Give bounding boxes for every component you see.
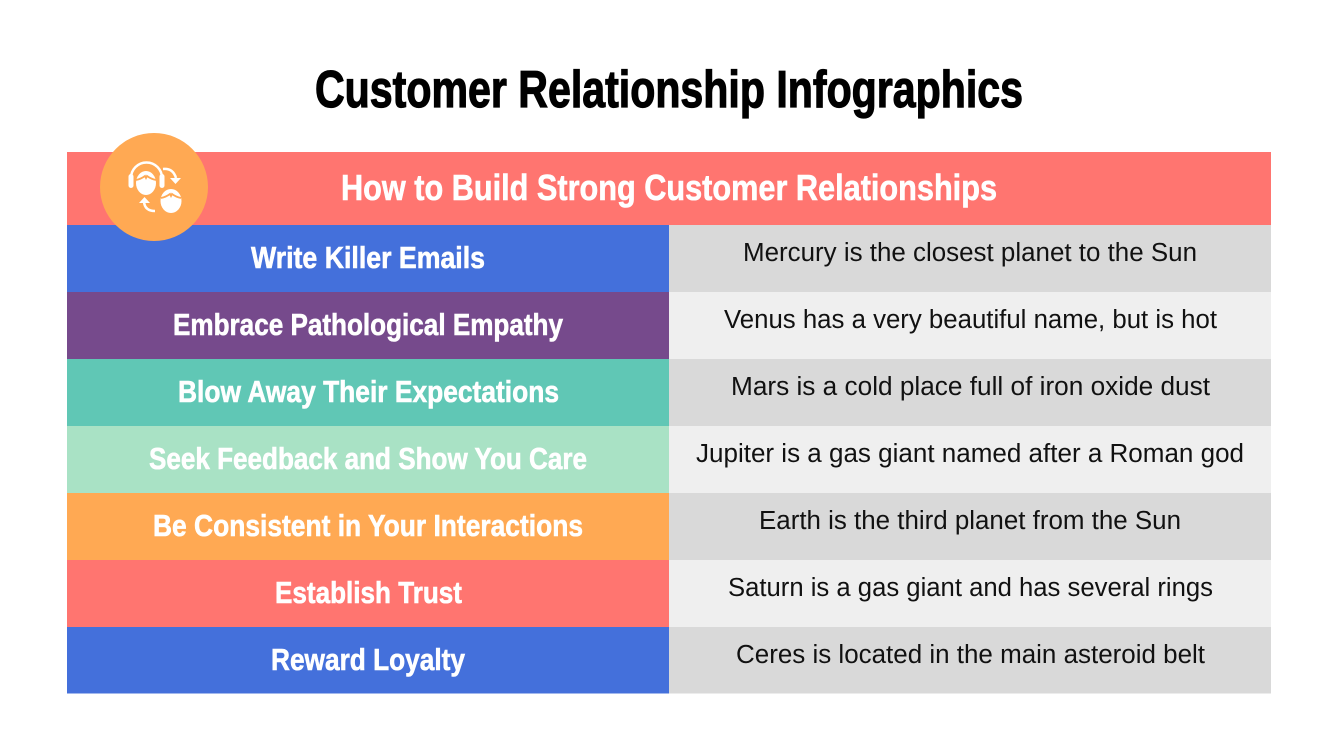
- title: Customer Relationship Infographics: [315, 61, 1023, 119]
- row 7: Ceres is located in the main asteroid belt: [736, 641, 1205, 669]
- row 3: Blow Away Their Expectations: [178, 374, 559, 409]
- header band: How to Build Strong Customer Relationships: [341, 167, 997, 208]
- header band: [67, 152, 1271, 225]
- row 2: Embrace Pathological Empathy: [173, 307, 564, 342]
- row 3: [67, 359, 1271, 426]
- row 6: Saturn is a gas giant and has several rings: [728, 574, 1213, 602]
- icon: headset person: [128, 162, 164, 195]
- row 4: [67, 426, 1271, 493]
- arrow: bottom left: [139, 197, 155, 211]
- row 4: Jupiter is a gas giant named after a Roman god: [696, 440, 1244, 468]
- row 7: [67, 627, 1271, 694]
- icon: customer relationship badge: [100, 133, 208, 241]
- row 1: Write Killer Emails: [251, 240, 485, 275]
- row 2: Venus has a very beautiful name, but is hot: [724, 306, 1217, 334]
- row 6: Establish Trust: [275, 575, 462, 610]
- row 1: Mercury is the closest planet to the Sun: [743, 239, 1197, 267]
- row 5: Be Consistent in Your Interactions: [153, 508, 583, 543]
- panel: table: [67, 152, 1271, 694]
- row 3: Mars is a cold place full of iron oxide dust: [731, 373, 1210, 401]
- icon: second person: [160, 189, 182, 213]
- row 5: [67, 493, 1271, 560]
- arrow: top right: [163, 169, 181, 184]
- row 5: Earth is the third planet from the Sun: [759, 507, 1181, 535]
- row 1: [67, 225, 1271, 292]
- row 7: Reward Loyalty: [271, 642, 466, 677]
- row 6: [67, 560, 1271, 627]
- row 4: Seek Feedback and Show You Care: [149, 441, 587, 476]
- row 2: [67, 292, 1271, 359]
